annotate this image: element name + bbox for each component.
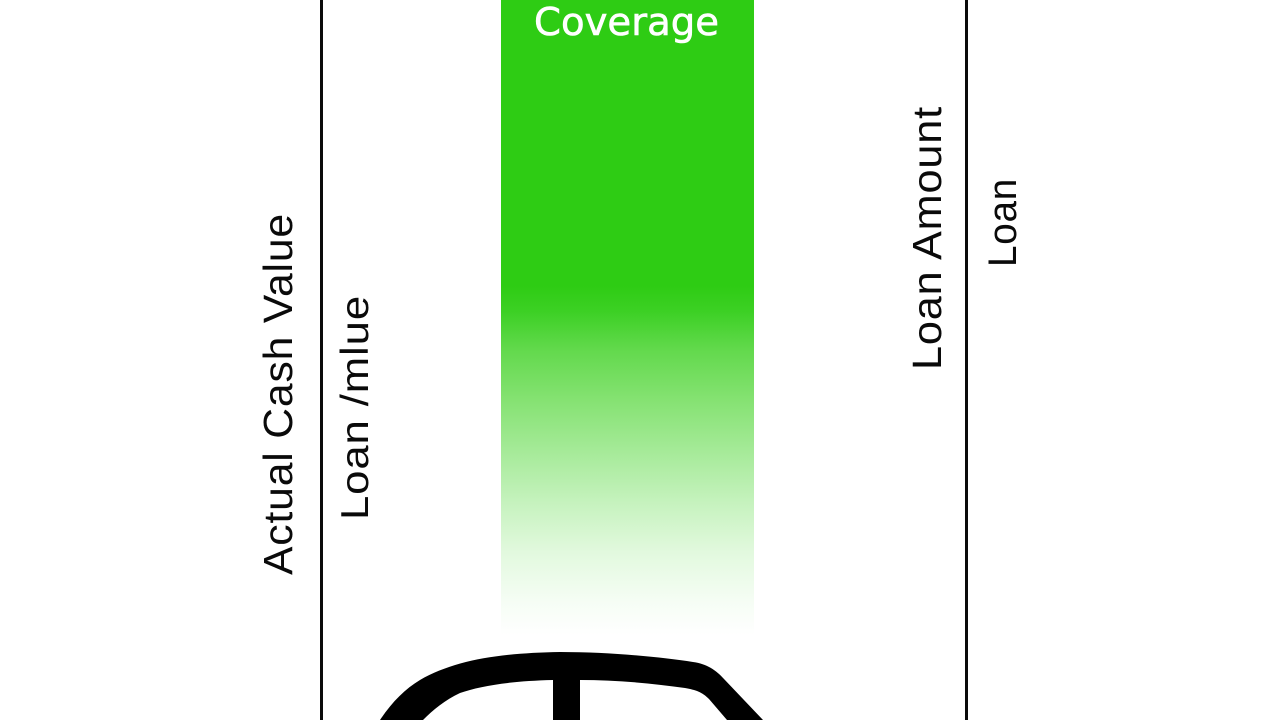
heading: Coverage: Coverage [534, 0, 719, 44]
left vertical boundary line [320, 0, 323, 720]
label: Loan Amount: Loan Amount [904, 106, 950, 370]
label: Loan /mlue: Loan /mlue [334, 295, 377, 520]
label: Loan: Loan [981, 178, 1025, 267]
right vertical boundary line [965, 0, 968, 720]
icon: car roof outline [380, 652, 763, 720]
panel: green coverage column [501, 0, 754, 635]
label: Actual Cash Value: Actual Cash Value [255, 213, 301, 575]
